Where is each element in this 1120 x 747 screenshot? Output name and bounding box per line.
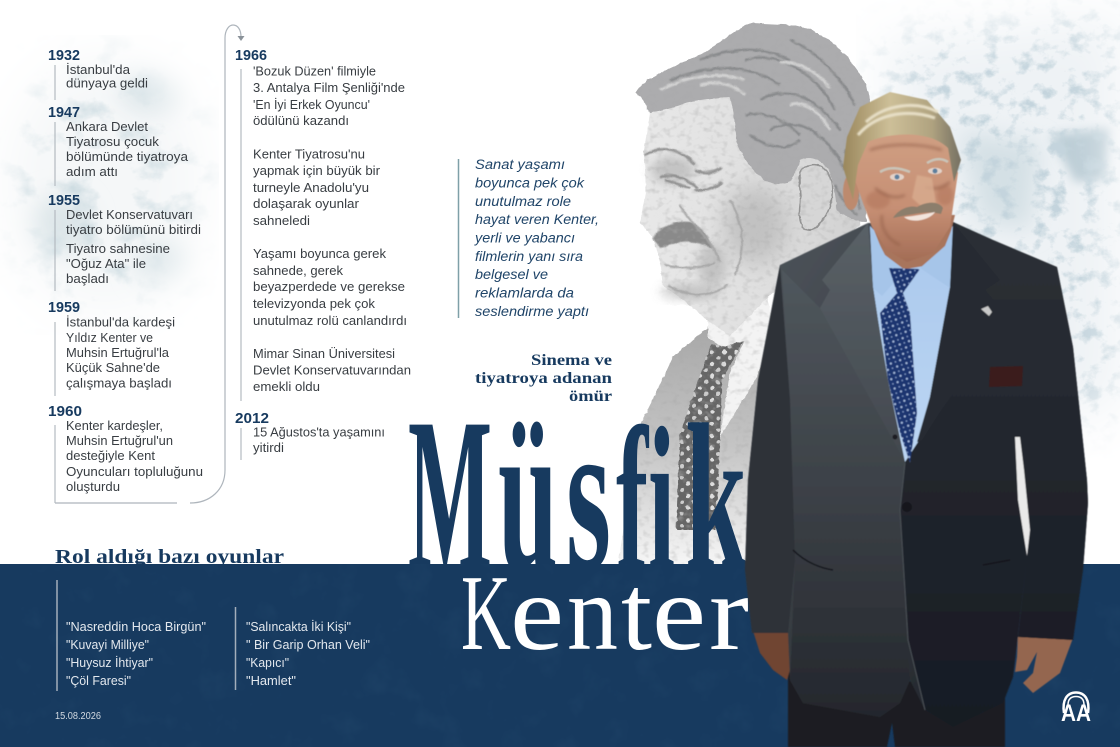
- title: Kenter: e: [510, 554, 564, 673]
- entry 1960: 1960: [48, 403, 82, 420]
- portrait: ear: [799, 165, 832, 230]
- plays list: right: "Hamlet": [246, 674, 296, 688]
- background texture: right: [862, 0, 1120, 428]
- entry 1966: 1966: [235, 47, 267, 64]
- quote block: yerli ve yabancı: [474, 230, 575, 246]
- hair: [843, 92, 961, 200]
- plays list: left: "Huysuz İhtiyar": [66, 656, 153, 670]
- eyebrows: [880, 159, 948, 172]
- jacket button: [902, 502, 912, 512]
- entry 1966: dolaşarak oyunlar: [253, 196, 360, 211]
- shirt collar: [870, 226, 953, 296]
- entry 1960: Muhsin Ertuğrul'un: [66, 433, 173, 448]
- timeline: left column: [48, 47, 203, 503]
- entry 2012: [235, 410, 385, 460]
- entry 2012: 15 Ağustos'ta yaşamını: [253, 424, 385, 440]
- quote block: seslendirme yaptı: [475, 304, 589, 319]
- subtitle: Sinema ve: [531, 352, 612, 369]
- entry 2012: yitirdi: [253, 440, 284, 455]
- pocket square: [989, 366, 1023, 387]
- title: Kenter: n: [567, 554, 618, 673]
- portrait: eyebrow and eye: [645, 149, 722, 191]
- entry 1966: 'Bozuk Düzen' filmiyle: [253, 64, 376, 78]
- entry 1966: beyazperdede ve gerekse: [253, 279, 405, 294]
- entry 1966: unutulmaz rolü canlandırdı: [253, 313, 407, 328]
- title: Kenter: K: [461, 554, 511, 673]
- entry 1959: çalışmaya başladı: [66, 376, 172, 390]
- quote block: reklamlarda da: [475, 286, 575, 300]
- entry 1960: Kenter kardeşler,: [66, 418, 163, 433]
- jacket pockets: [793, 550, 1010, 570]
- entry 1966: 'En İyi Erkek Oyuncu': [253, 97, 370, 112]
- entry 1966: televizyonda pek çok: [253, 296, 375, 311]
- entry 1966: Kenter Tiyatrosu'nu: [253, 146, 365, 162]
- plays list: left: "Nasreddin Hoca Birgün": [66, 620, 206, 634]
- entry 1966: Devlet Konservatuvarından: [253, 362, 411, 378]
- timeline connector: [55, 25, 241, 503]
- title: Müsfik: M: [408, 374, 492, 616]
- portrait: hair: [636, 23, 872, 222]
- nose: [912, 175, 936, 207]
- lapel pin: [981, 306, 992, 316]
- portrait: necktie: [676, 342, 743, 530]
- mouth: [904, 212, 935, 221]
- portrait: shirt: [708, 295, 772, 437]
- plays list: left: [57, 580, 206, 691]
- right hand: [1015, 635, 1073, 693]
- entry 1955: Devlet Konservatuvarı: [66, 207, 193, 222]
- left hand: [753, 631, 792, 680]
- entry 1966: yapmak için büyük bir: [253, 163, 381, 178]
- necktie: [880, 268, 920, 463]
- hair highlight: [858, 105, 938, 135]
- entry 1966: Yaşamı boyunca gerek: [253, 246, 387, 261]
- title: Müsfik: ü: [498, 374, 558, 616]
- entry 1959: Küçük Sahne'de: [66, 360, 160, 375]
- entry 1955: tiyatro bölümünü bitirdi: [66, 222, 201, 237]
- timeline arrowhead: [238, 36, 244, 41]
- navy bottom panel: [0, 564, 1120, 747]
- entry 1955: [48, 192, 201, 291]
- title: Müsfik: s: [566, 374, 611, 616]
- date: 15.08.2026: [55, 711, 101, 722]
- right lapel: [917, 222, 1003, 442]
- sliver between arm and body: [1015, 437, 1030, 556]
- quote block: unutulmaz role: [475, 194, 571, 209]
- quote block: Sanat yaşamı: [475, 157, 565, 172]
- timeline: right column: [235, 47, 411, 460]
- entry 2012: 2012: [235, 410, 269, 427]
- quote block: filmlerin yanı sıra: [475, 249, 584, 264]
- subtitle: tiyatroya adanan: [475, 370, 612, 387]
- entry 1966: [235, 47, 411, 401]
- jacket right panel shadow: [900, 222, 1088, 727]
- plays list: right: " Bir Garip Orhan Veli": [246, 638, 370, 652]
- jacket edge line: [900, 463, 925, 710]
- entry 1947: bölümünde tiyatroya: [66, 149, 189, 164]
- title: Müsfik: [410, 422, 746, 564]
- entry 1959: Yıldız Kenter ve: [66, 330, 153, 345]
- background texture: left: [4, 42, 214, 312]
- quote block: [458, 157, 599, 319]
- subtitle: [475, 352, 612, 405]
- entry 1966: ödülünü kazandı: [253, 113, 349, 128]
- portrait: hair strands: [670, 40, 860, 215]
- neck: [868, 215, 955, 270]
- entry 1932: dünyaya geldi: [66, 76, 148, 90]
- left lapel: [820, 223, 905, 462]
- section heading: plays: Rol aldığı bazı oyunlar: [55, 547, 284, 568]
- shirt: [870, 226, 953, 462]
- portrait: wrinkles: [665, 200, 742, 294]
- entry 1966: turneyle Anadolu'yu: [253, 180, 369, 195]
- entry 1959: 1959: [48, 299, 80, 316]
- subtitle: ömür: [569, 388, 612, 405]
- quote block: belgesel ve: [475, 267, 548, 282]
- portrait: moustache: [653, 222, 712, 248]
- entry 1960: [48, 403, 203, 503]
- eyes: [890, 168, 942, 180]
- portrait: hair highlights: [660, 62, 830, 130]
- quote block: boyunca pek çok: [475, 176, 585, 190]
- entry 1959: [48, 299, 175, 396]
- entry 1932: İstanbul'da: [66, 62, 131, 77]
- ear: [843, 174, 859, 210]
- entry 1947: Ankara Devlet: [66, 119, 148, 134]
- entry 1932: 1932: [48, 47, 80, 64]
- title: Kenter: r: [709, 554, 749, 673]
- moustache: [893, 203, 943, 218]
- jacket left front panel: [782, 270, 910, 717]
- entry 1955: 1955: [48, 192, 80, 209]
- portrait: face shading: [650, 156, 787, 300]
- sketch portrait: [618, 23, 872, 564]
- entry 1955: başladı: [66, 271, 109, 286]
- trousers: [788, 670, 1005, 747]
- plays list: right: "Salıncakta İki Kişi": [246, 620, 351, 634]
- title: Kenter: e: [652, 554, 706, 673]
- entry 1966: emekli oldu: [253, 379, 320, 394]
- entry 1932: [48, 47, 148, 100]
- entry 1966: sahneledi: [253, 213, 310, 228]
- title: Kenter: t: [621, 554, 652, 673]
- title: Müsfik: fi: [616, 386, 675, 613]
- plays list: left: "Çöl Faresi": [66, 674, 131, 688]
- entry 1955: "Oğuz Ata" ile: [66, 256, 146, 271]
- title: Müsfik: k: [685, 382, 747, 614]
- entry 1947: [48, 104, 189, 186]
- AA logo: [1061, 692, 1091, 727]
- plays list: right: "Kapıcı": [246, 656, 289, 670]
- face: [855, 128, 958, 262]
- entry 1959: Muhsin Ertuğrul'la: [66, 345, 170, 360]
- entry 1966: Mimar Sinan Üniversitesi: [253, 346, 395, 361]
- entry 1959: İstanbul'da kardeşi: [66, 314, 175, 330]
- portrait: face: [640, 60, 868, 336]
- left sleeve: [745, 265, 795, 633]
- entry 1966: 3. Antalya Film Şenliği'nde: [253, 80, 405, 95]
- plays list: right: [236, 607, 370, 690]
- quote block: hayat veren Kenter,: [475, 212, 599, 227]
- entry 1966: sahnede, gerek: [253, 263, 343, 278]
- jacket: [745, 222, 1088, 727]
- entry 1960: desteğiyle Kent: [66, 448, 155, 463]
- entry 1947: Tiyatrosu çocuk: [66, 134, 159, 149]
- entry 1960: Oyuncuları topluluğunu: [66, 464, 203, 479]
- face shading: [866, 145, 953, 245]
- jacket button upper: [892, 434, 898, 440]
- person photo: [745, 92, 1088, 747]
- plays list: left: "Kuvayi Milliye": [66, 638, 149, 652]
- entry 1947: adım attı: [66, 164, 118, 179]
- portrait: body: [618, 327, 775, 564]
- AA logo: AA: [1061, 700, 1091, 727]
- entry 1960: oluşturdu: [66, 479, 120, 494]
- entry 1947: 1947: [48, 104, 80, 121]
- entry 1955: Tiyatro sahnesine: [66, 241, 170, 256]
